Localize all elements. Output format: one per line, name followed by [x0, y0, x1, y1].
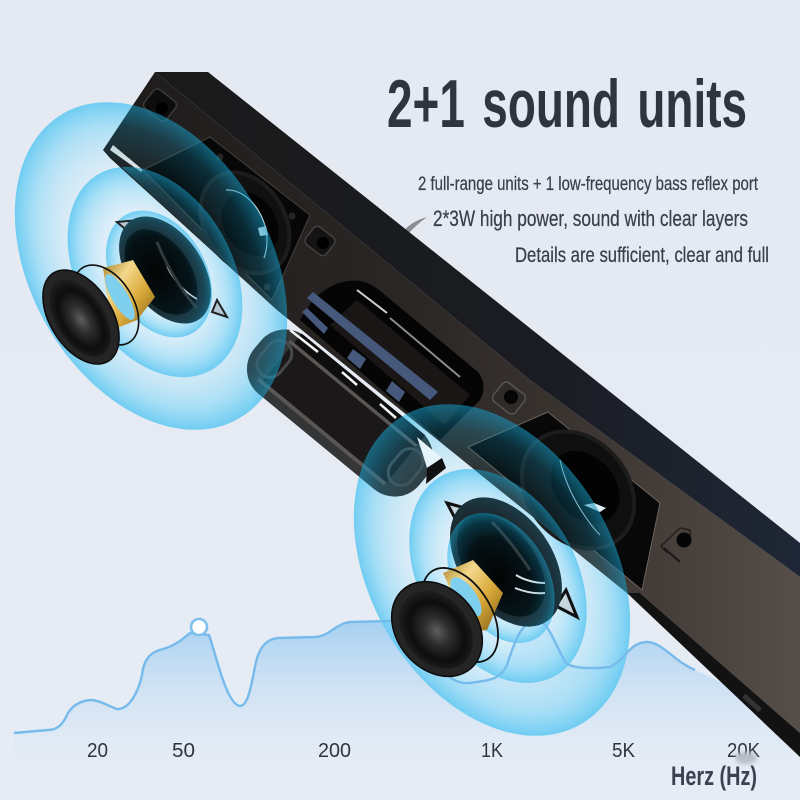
passive bass tube: [234, 316, 446, 510]
description text: [418, 174, 769, 267]
screw mount, centre-left: [303, 224, 337, 258]
frequency axis labels: 200: [318, 740, 351, 762]
tube right cap detail: [383, 443, 428, 491]
left speaker driver: gold coil and cone: [27, 253, 155, 378]
sound waves: left speaker, light rings: [0, 54, 343, 478]
frequency axis labels: 20: [87, 740, 108, 762]
axis unit label: Herz (Hz): [671, 761, 757, 791]
port highlight dashes: [290, 330, 396, 418]
bass port opening: [300, 281, 484, 440]
smudge over 20K label: [735, 752, 757, 764]
sound waves: overlay on dark parts: [103, 105, 628, 676]
soundbar front face: [103, 72, 800, 733]
frequency axis labels: 50: [172, 740, 195, 762]
soundbar body: [103, 72, 800, 757]
smudge near bar edge: [403, 217, 427, 234]
gap between tube and bar: [417, 437, 442, 468]
frequency axis labels: 5K: [612, 740, 636, 762]
port gloss lines: [357, 290, 460, 377]
frequency response chart: [14, 620, 800, 790]
soundbar top face: [155, 72, 800, 577]
frequency axis labels: 20K: [727, 740, 761, 762]
tube gray strips: [288, 340, 418, 447]
soundbar bottom strip: [627, 593, 800, 757]
screw mount, centre-right: [491, 380, 527, 416]
rear screw mount, top: [142, 87, 178, 123]
frequency curve line with peak marker: [14, 619, 695, 733]
screw mount, right: [661, 528, 692, 562]
navy port strips: [302, 292, 438, 402]
frequency axis labels: 1K: [481, 740, 504, 762]
tube interior: [260, 334, 425, 485]
speaker recess, left: [143, 137, 310, 300]
right speaker basket: [427, 477, 585, 647]
tube frame bracket: [426, 458, 446, 484]
right speaker driver: gold coil and cone: [373, 554, 514, 695]
tube left cap detail: [252, 335, 297, 383]
speaker recess, right: [468, 409, 660, 590]
left speaker basket: [100, 200, 230, 340]
frequency axis labels: [87, 740, 761, 762]
sound waves: right speaker, light rings: [297, 355, 687, 785]
